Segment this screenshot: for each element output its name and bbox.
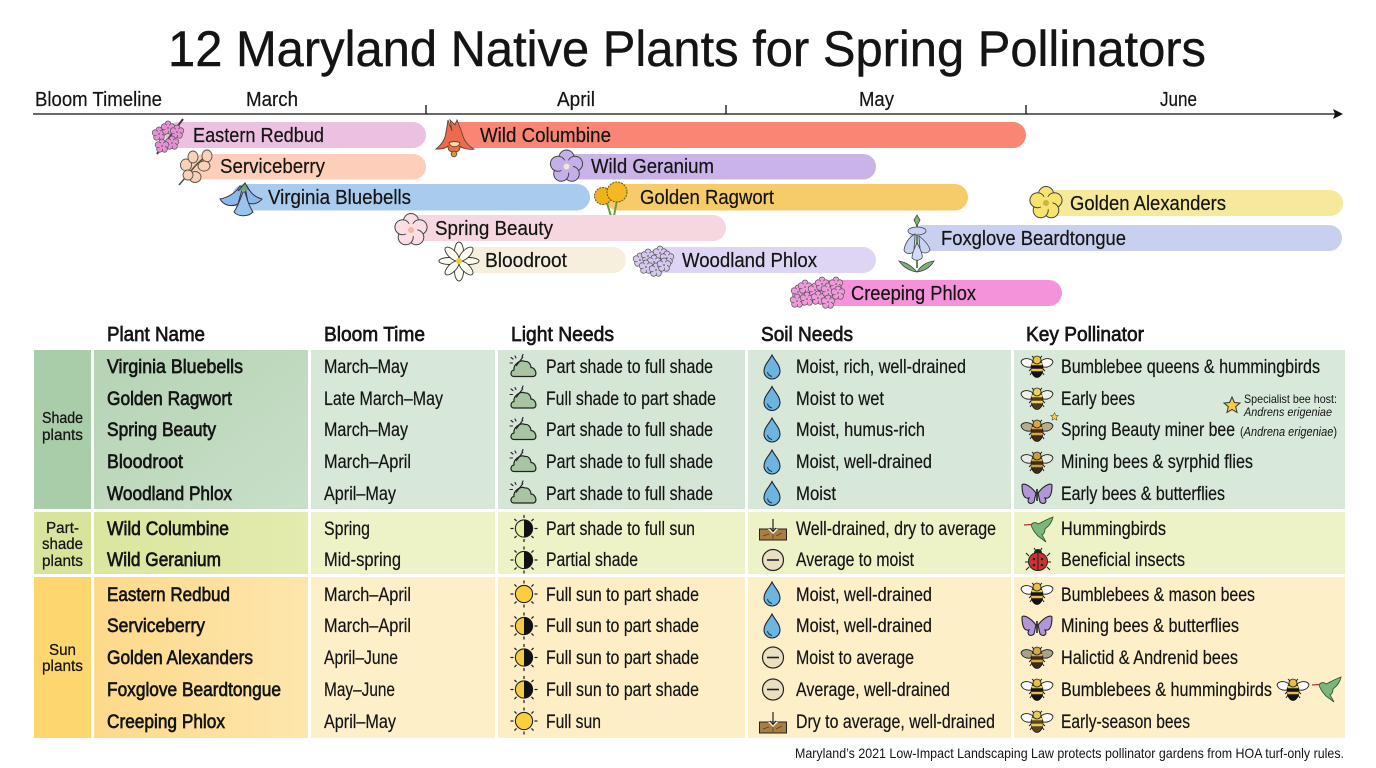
group label: sun plants: Sun: [49, 642, 76, 659]
row: Serviceberry: Serviceberry: [107, 615, 205, 637]
row: Wild Columbine: [107, 516, 1166, 542]
row: Virginia Bluebells: Bumblebee queens & hummingbirds: [1061, 357, 1320, 378]
row: Foxglove Beardtongue: Bumblebees & hummingbirds: [1061, 680, 1272, 701]
row: Woodland Phlox: Part shade to full shade: [546, 484, 713, 505]
row: Foxglove Beardtongue: Average, well-drained: [796, 680, 950, 701]
row: Eastern Redbud: Moist, well-drained: [796, 585, 932, 606]
row: Golden Alexanders: Halictid & Andrenid bees: [1061, 648, 1238, 669]
bar: Bloodroot: Bloodroot: [485, 250, 567, 272]
bar: Creeping Phlox: [789, 277, 1062, 309]
row: Virginia Bluebells: Moist, rich, well-drained: [796, 357, 966, 378]
icon: geranium flower: [548, 150, 585, 184]
row: Wild Columbine: Spring: [324, 519, 370, 540]
icon: columbine flower: [436, 120, 474, 157]
row: Virginia Bluebells: [107, 354, 1320, 379]
icon: bloodroot flower: [439, 242, 479, 281]
table column headers: Bloom Time: [324, 324, 425, 346]
callout: specialist bee host: [1224, 392, 1337, 419]
row: Spring Beauty: (Andrena erigeniae): [1240, 424, 1337, 439]
row: Virginia Bluebells: Part shade to full shade: [546, 357, 713, 378]
row: Golden Ragwort: Moist to wet: [796, 389, 885, 410]
group label: part-shade plants: plants: [42, 553, 83, 570]
group label: shade plants: [42, 410, 83, 444]
row: Golden Ragwort: Late March–May: [324, 389, 443, 410]
row: Serviceberry: Moist, well-drained: [796, 616, 932, 637]
bar: Golden Alexanders: [1028, 186, 1343, 221]
bar: Woodland Phlox: [632, 246, 876, 277]
bloom timeline: [33, 89, 1343, 309]
row: Spring Beauty: Part shade to full shade: [546, 420, 713, 441]
row: Golden Alexanders: [107, 644, 1238, 670]
table column headers: Key Pollinator: [1026, 324, 1144, 346]
row: Eastern Redbud: [107, 581, 1255, 607]
row: Eastern Redbud: Eastern Redbud: [107, 584, 230, 606]
bar: Spring Beauty: [393, 214, 726, 248]
icon: serviceberry blossoms: [179, 150, 212, 185]
row: Golden Ragwort: Golden Ragwort: [107, 388, 233, 410]
group label: shade plants: plants: [42, 427, 83, 444]
table column headers: Light Needs: [511, 324, 614, 346]
row: Woodland Phlox: April–May: [324, 484, 396, 505]
month labels: May: [859, 89, 894, 111]
panel: part-shade plants: [34, 512, 1345, 574]
bar: Virginia Bluebells: Virginia Bluebells: [268, 187, 411, 209]
table column headers: Plant Name: [107, 324, 205, 346]
bar: Woodland Phlox: Woodland Phlox: [682, 250, 817, 272]
icon: spring beauty flower: [393, 214, 429, 248]
row: Spring Beauty: Spring Beauty: [107, 419, 216, 441]
bar: Eastern Redbud: [151, 119, 426, 154]
row: Woodland Phlox: Moist: [796, 484, 837, 505]
row: Wild Columbine: Wild Columbine: [107, 518, 229, 540]
group label: sun plants: plants: [42, 658, 83, 675]
month labels: June: [1160, 89, 1197, 111]
row: Wild Columbine: Part shade to full sun: [546, 519, 695, 540]
row: Eastern Redbud: March–April: [324, 585, 411, 606]
row: Spring Beauty: March–May: [324, 420, 408, 441]
row: Spring Beauty: Moist, humus-rich: [796, 420, 925, 441]
icon: creeping phlox cluster: [789, 277, 846, 309]
row: Bloodroot: March–April: [324, 452, 411, 473]
row: Bloodroot: Moist, well-drained: [796, 452, 932, 473]
bar: Golden Ragwort: Golden Ragwort: [640, 187, 774, 209]
bar: Virginia Bluebells: [220, 183, 590, 216]
row: Wild Geranium: Mid-spring: [324, 550, 401, 571]
row: Woodland Phlox: Early bees & butterflies: [1061, 484, 1225, 505]
bar: Wild Columbine: [436, 120, 1026, 157]
group label: shade plants: Shade: [42, 410, 83, 427]
row: Creeping Phlox: Early-season bees: [1061, 712, 1190, 733]
timeline label: Bloom Timeline: [35, 89, 162, 111]
panel: shade plants: [34, 350, 1345, 509]
row: Wild Geranium: Average to moist: [796, 550, 915, 571]
group label: sun plants: [42, 642, 83, 675]
icon: redbud blossoms: [151, 119, 185, 154]
row: Bloodroot: Bloodroot: [107, 451, 184, 473]
title: 12 Maryland Native Plants for Spring Pollinators: [168, 21, 1206, 77]
row: Spring Beauty: [107, 412, 1337, 442]
row: Serviceberry: [107, 613, 1239, 639]
bar: Wild Geranium: [548, 150, 876, 184]
panel: sun plants: [34, 577, 1345, 738]
row: Foxglove Beardtongue: May–June: [324, 680, 395, 701]
row: Bloodroot: Mining bees & syrphid flies: [1061, 452, 1253, 473]
bar: Wild Geranium: Wild Geranium: [591, 156, 714, 178]
row: Wild Columbine: Hummingbirds: [1061, 519, 1166, 540]
row: Creeping Phlox: Creeping Phlox: [107, 711, 225, 733]
timeline axis with arrow: [33, 105, 1343, 119]
bar: Golden Alexanders: Golden Alexanders: [1070, 193, 1226, 215]
bar: Serviceberry: [179, 150, 426, 185]
group label: part-shade plants: Part-: [46, 520, 79, 537]
row: Woodland Phlox: [107, 481, 1225, 506]
icon: foxglove stalk: [899, 215, 934, 272]
table column headers: [107, 324, 1144, 346]
table column headers: Soil Needs: [761, 324, 853, 346]
bar: Spring Beauty: Spring Beauty: [435, 218, 553, 240]
row: Golden Ragwort: Full shade to part shade: [546, 389, 716, 410]
row: Wild Geranium: [107, 547, 1185, 573]
row: Bloodroot: Part shade to full shade: [546, 452, 713, 473]
row: Golden Alexanders: Golden Alexanders: [107, 647, 253, 669]
row: Creeping Phlox: April–May: [324, 712, 396, 733]
row: Golden Ragwort: Early bees: [1061, 389, 1135, 410]
row: Foxglove Beardtongue: Foxglove Beardtongue: [107, 679, 281, 701]
icon: woodland phlox cluster: [632, 246, 675, 277]
callout: specialist bee host: Specialist bee host:: [1244, 392, 1337, 406]
bar: Eastern Redbud: Eastern Redbud: [193, 125, 324, 147]
row: Golden Ragwort: [107, 386, 1135, 410]
row: Wild Geranium: Wild Geranium: [107, 549, 221, 571]
row: Virginia Bluebells: Virginia Bluebells: [107, 356, 243, 378]
row: Foxglove Beardtongue: [107, 676, 1341, 702]
bar: Bloodroot: [439, 242, 626, 281]
icon: golden alexanders flower: [1028, 186, 1064, 221]
row: Creeping Phlox: Dry to average, well-drained: [796, 712, 995, 733]
row: Serviceberry: Mining bees & butterflies: [1061, 616, 1239, 637]
group label: part-shade plants: shade: [42, 536, 83, 553]
row: Wild Geranium: Partial shade: [546, 550, 638, 571]
row: Spring Beauty: Spring Beauty miner bee: [1061, 420, 1235, 441]
bar: Serviceberry: Serviceberry: [220, 156, 325, 178]
row: Foxglove Beardtongue: Full sun to part shade: [546, 680, 699, 701]
row: Woodland Phlox: Woodland Phlox: [107, 483, 232, 505]
row: Eastern Redbud: Bumblebees & mason bees: [1061, 585, 1255, 606]
icon: ragwort flower heads: [594, 182, 627, 216]
row: Virginia Bluebells: March–May: [324, 357, 408, 378]
row: Serviceberry: Full sun to part shade: [546, 616, 699, 637]
bar: Foxglove Beardtongue: [899, 215, 1342, 272]
month labels: [246, 89, 1197, 111]
row: Golden Alexanders: April–June: [324, 648, 398, 669]
row: Creeping Phlox: Full sun: [546, 712, 601, 733]
bar: Golden Ragwort: [594, 182, 968, 216]
group label: part-shade plants: [42, 520, 83, 570]
bar: Foxglove Beardtongue: Foxglove Beardtongue: [941, 228, 1126, 250]
row: Eastern Redbud: Full sun to part shade: [546, 585, 699, 606]
icon: bluebells: [220, 183, 262, 216]
callout: specialist bee host: Andrens erigeniae: [1243, 405, 1332, 419]
row: Wild Geranium: Beneficial insects: [1061, 550, 1185, 571]
bar: Creeping Phlox: Creeping Phlox: [851, 283, 976, 305]
row: Golden Alexanders: Full sun to part shade: [546, 648, 699, 669]
row: Creeping Phlox: [107, 708, 1190, 734]
bar: Wild Columbine: Wild Columbine: [480, 125, 611, 147]
row: Wild Columbine: Well-drained, dry to average: [796, 519, 996, 540]
row: Golden Alexanders: Moist to average: [796, 648, 914, 669]
month labels: March: [246, 89, 298, 111]
row: Serviceberry: March–April: [324, 616, 411, 637]
month labels: April: [557, 89, 595, 111]
row: Bloodroot: [107, 450, 1253, 474]
